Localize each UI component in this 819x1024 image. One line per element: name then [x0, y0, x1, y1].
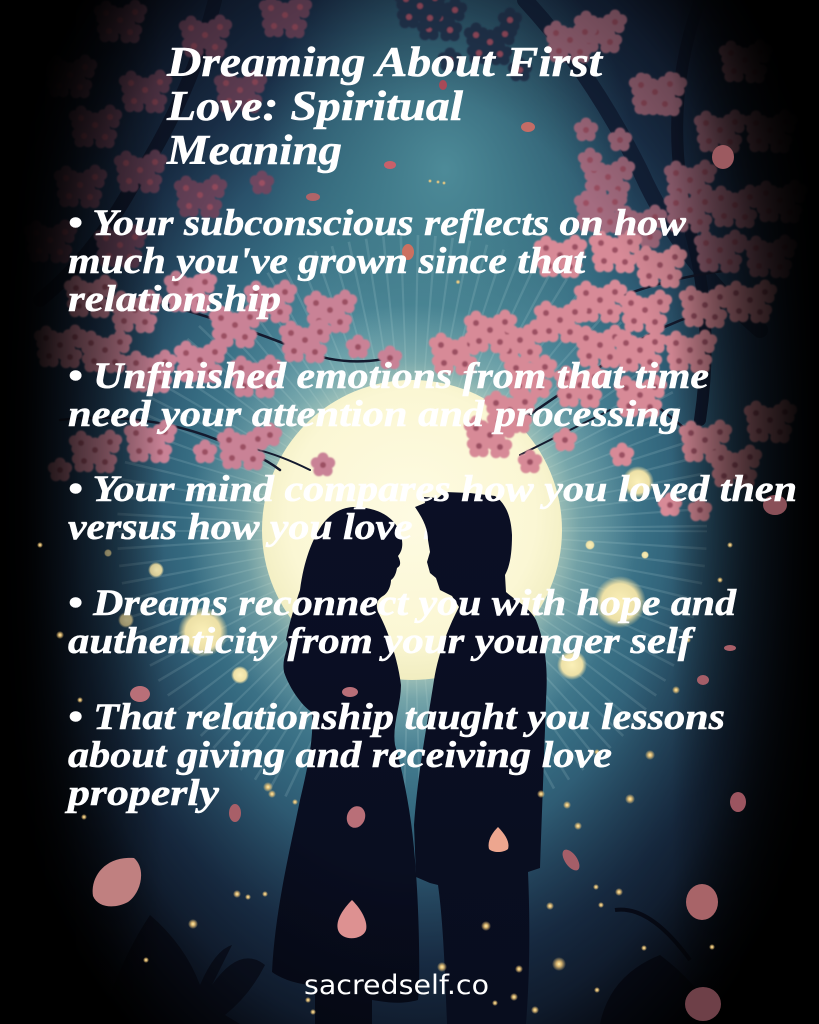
falling petals — [93, 80, 787, 1021]
bullet: growth: relationship — [68, 279, 281, 320]
dark top blossoms — [394, 0, 532, 81]
silhouette: man — [414, 492, 547, 1024]
cherry blossoms: top right — [544, 10, 807, 278]
foliage silhouettes: bottom right — [600, 910, 720, 1024]
bullet: unfinished emotions — [68, 356, 709, 435]
title: Love: Spiritual — [166, 84, 463, 130]
full moon — [262, 380, 562, 680]
bullet: hope and authenticity: • Dreams reconnect you with hope and — [68, 583, 737, 624]
bullet: lessons: about giving and receiving love — [68, 735, 612, 776]
bullet: growth: much you've grown since that — [68, 241, 587, 282]
glowing orbs — [104, 466, 654, 684]
title: Meaning — [166, 128, 342, 174]
bullet: unfinished emotions: • Unfinished emotions from that time — [68, 356, 709, 397]
title: Dreaming About First — [166, 40, 603, 86]
bullet: hope and authenticity — [68, 583, 737, 662]
dark tree trunks and branches — [40, 0, 760, 470]
footer: site name: sacredself.co — [304, 970, 489, 1001]
title — [166, 40, 603, 174]
bullet: growth — [68, 203, 686, 320]
silhouette: woman — [272, 507, 419, 1024]
bullet: comparing love: • Your mind compares how you loved then — [68, 469, 797, 510]
cherry blossoms: top left — [24, 0, 312, 268]
bullet: growth: • Your subconscious reflects on how — [68, 203, 686, 244]
body line behind the man: versus how you love now — [68, 507, 495, 548]
bullet: lessons: properly — [64, 773, 220, 814]
foliage silhouettes: bottom left — [100, 915, 265, 1024]
bullet: lessons — [64, 697, 725, 814]
cherry blossoms: central left canopy — [34, 270, 402, 481]
bullet: lessons: • That relationship taught you lessons — [68, 697, 725, 738]
bullet: unfinished emotions: need your attention and processing — [68, 394, 681, 435]
cherry blossoms: central right canopy — [429, 230, 797, 521]
fireflies — [37, 179, 733, 1015]
moon glow rays — [187, 305, 637, 755]
bullet: hope and authenticity: authenticity from your younger self — [68, 621, 696, 662]
